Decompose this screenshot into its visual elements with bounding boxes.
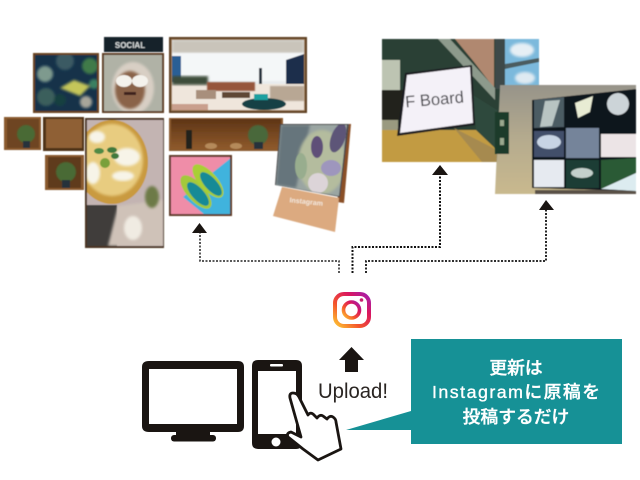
icon: upload arrow <box>339 347 364 372</box>
dashed arrow: to photo wall <box>192 223 339 273</box>
label: easel brand text: Instagram <box>289 197 323 208</box>
icon: pointing hand <box>287 393 341 460</box>
panel: SOCIAL sign <box>104 37 163 52</box>
dashed arrow: to video wall <box>366 200 554 273</box>
callout text: 投稿するだけ <box>463 407 569 427</box>
panel: dark sign behind wall photo <box>495 112 509 154</box>
panel: shelf with plant lower <box>45 155 84 190</box>
photo: video wall <box>495 85 636 194</box>
panel: shoes photo frame <box>169 155 232 216</box>
panel: shelf with plant left <box>4 117 41 150</box>
callout text <box>432 358 600 427</box>
icon: desktop monitor <box>142 361 244 442</box>
dashed arrow: to F Board <box>352 165 448 273</box>
panel: long shelf <box>169 118 283 151</box>
panel: empty shelf <box>43 117 84 151</box>
callout <box>346 339 622 444</box>
label: Upload!: Upload! <box>318 380 388 403</box>
photo wall of framed displays <box>4 37 351 248</box>
wall tile <box>534 97 564 128</box>
sign board <box>397 65 475 136</box>
panel: pizza photo frame <box>76 118 164 248</box>
label: F Board: F Board <box>405 88 465 112</box>
callout text: Instagramに原稿を <box>432 382 600 402</box>
panel: succulent photo frame <box>33 52 99 113</box>
icon: Instagram <box>335 294 369 326</box>
panel: easel display <box>273 122 351 232</box>
photo: F Board hanging sign <box>382 39 539 162</box>
callout text: 更新は <box>489 358 543 378</box>
panel: lounge room photo frame <box>169 37 307 113</box>
icon: smartphone <box>252 360 302 449</box>
label: SOCIAL: SOCIAL <box>115 41 145 50</box>
panel: portrait photo frame <box>102 53 164 114</box>
